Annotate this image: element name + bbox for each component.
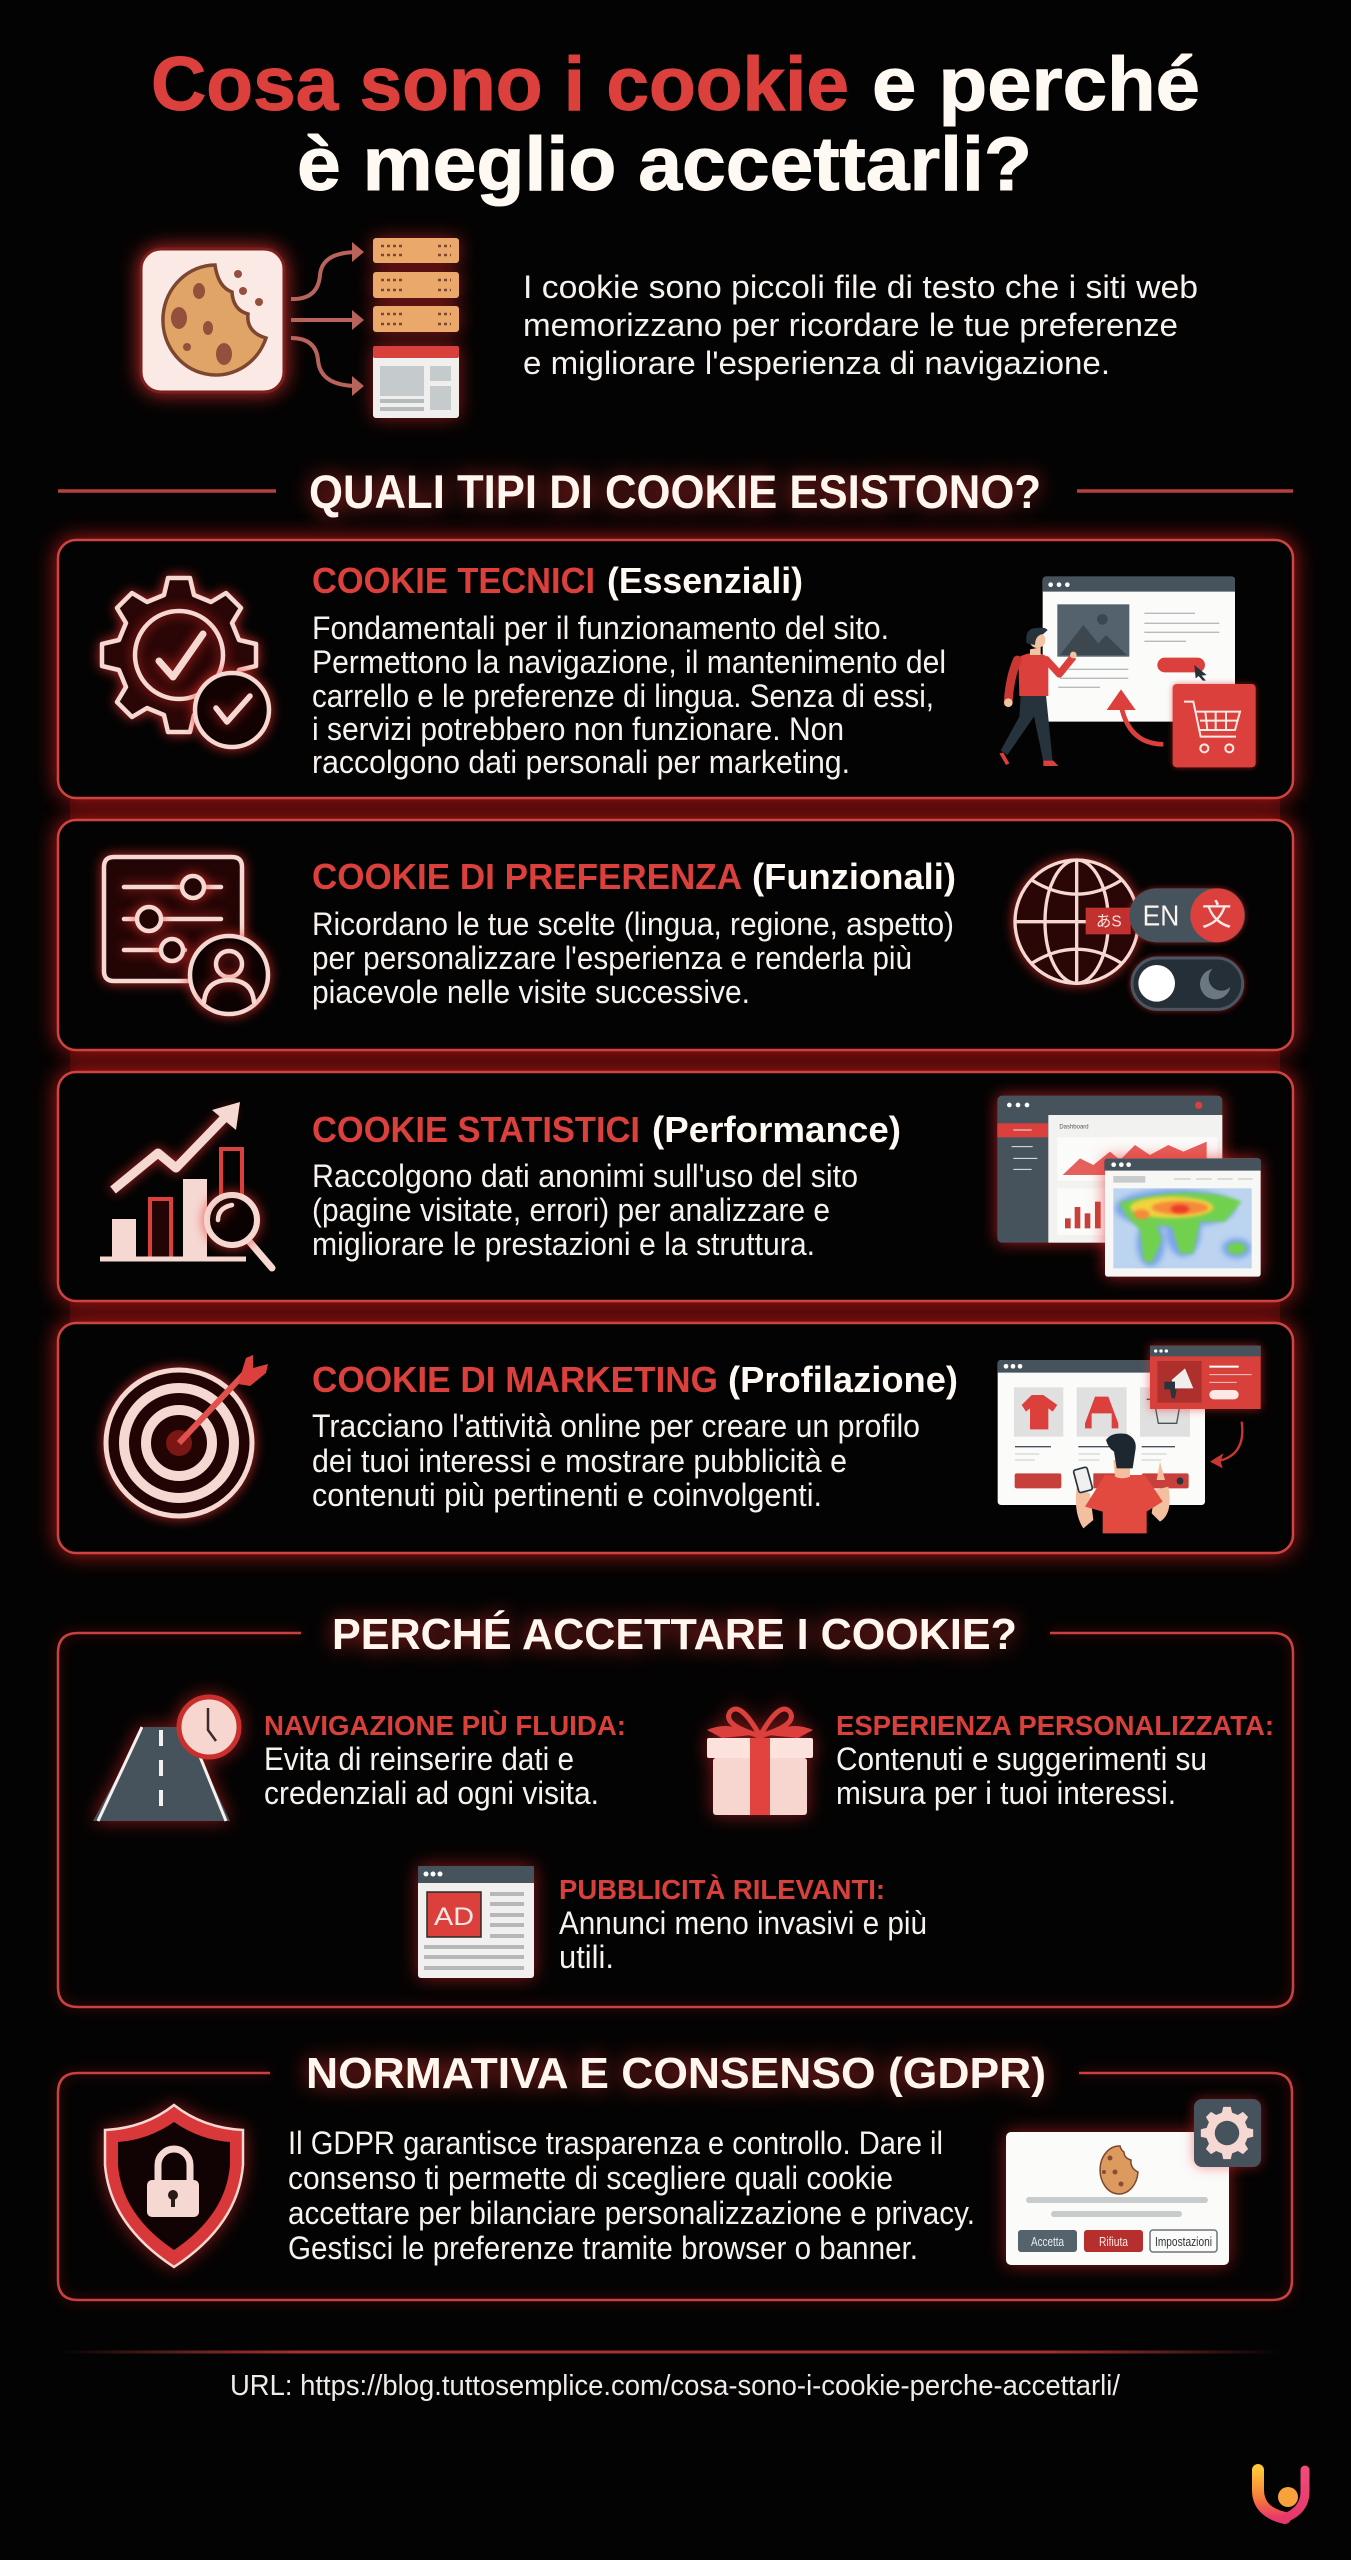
intro text xyxy=(523,269,1198,381)
benefit: pubblicità: PUBBLICITÀ RILEVANTI: xyxy=(559,1874,885,1905)
card text xyxy=(312,906,954,1010)
text: gdpr: Il GDPR garantisce trasparenza e controllo. Dare il xyxy=(288,2125,943,2161)
benefit: navigazione: Evita di reinserire dati e xyxy=(264,1741,574,1777)
illustration: globe and language toggles: あS xyxy=(1096,914,1122,931)
benefit: esperienza: ESPERIENZA PERSONALIZZATA: xyxy=(836,1710,1274,1741)
card text: raccolgono dati personali per marketing. xyxy=(312,744,850,780)
card text: dei tuoi interessi e mostrare pubblicità e xyxy=(312,1443,847,1479)
card heading xyxy=(312,1359,958,1400)
illustration: globe and language toggles: 文 xyxy=(1202,891,1232,935)
intro text: I cookie sono piccoli file di testo che i siti web xyxy=(523,269,1198,305)
icon: shield and lock xyxy=(105,2105,243,2267)
card heading: (Funzionali) xyxy=(752,856,956,897)
intro text: memorizzano per ricordare le tue preferenze xyxy=(523,307,1178,343)
icon: gear with checks xyxy=(102,578,269,747)
text: gdpr xyxy=(288,2125,975,2266)
card text: piacevole nelle visite successive. xyxy=(312,974,750,1010)
card text: Tracciano l'attività online per creare un profilo xyxy=(312,1408,920,1444)
benefit: pubblicità xyxy=(559,1874,927,1975)
card text: Fondamentali per il funzionamento del sito. xyxy=(312,610,889,646)
title xyxy=(151,42,1200,207)
card heading: (Essenziali) xyxy=(607,560,803,601)
title: e perché xyxy=(872,42,1200,127)
illustration: person, browser and cart xyxy=(999,577,1256,767)
card heading: COOKIE DI PREFERENZA xyxy=(312,856,742,897)
card heading: COOKIE STATISTICI xyxy=(312,1109,640,1150)
card text xyxy=(312,610,946,780)
icon: sliders and user xyxy=(104,857,268,1014)
heading: NORMATIVA E CONSENSO (GDPR) xyxy=(306,2049,1046,2098)
benefit: esperienza: Contenuti e suggerimenti su xyxy=(836,1741,1207,1777)
card text: (pagine visitate, errori) per analizzare e xyxy=(312,1192,830,1228)
icon: chart and magnifier xyxy=(100,1102,272,1268)
icon: cookie sent to servers and browser xyxy=(141,238,459,418)
benefit: esperienza xyxy=(836,1710,1274,1811)
heading: PERCHÉ ACCETTARE I COOKIE? xyxy=(332,1609,1017,1659)
illustration: cookie consent banner: Impostazioni xyxy=(1155,2235,1212,2249)
card text: carrello e le preferenze di lingua. Senza di essi, xyxy=(312,678,934,714)
source url: URL: https://blog.tuttosemplice.com/cosa-sono-i-cookie-perche-accettarli/ xyxy=(230,2370,1121,2402)
text: gdpr: accettare per bilanciare personalizzazione e privacy. xyxy=(288,2195,975,2231)
benefit: navigazione xyxy=(264,1710,626,1811)
card heading: COOKIE DI MARKETING xyxy=(312,1359,718,1400)
card heading: COOKIE TECNICI xyxy=(312,560,595,601)
benefit: navigazione: NAVIGAZIONE PIÙ FLUIDA: xyxy=(264,1710,626,1741)
panel: cookie di marketing xyxy=(58,1323,1293,1553)
card heading xyxy=(312,856,956,897)
icon: ad window xyxy=(418,1866,534,1978)
panel: cookie tecnici xyxy=(58,540,1293,798)
illustration: cookie consent banner: Rifiuta xyxy=(1099,2235,1128,2249)
benefit: navigazione: credenziali ad ogni visita. xyxy=(264,1775,599,1811)
icon: ad window: AD xyxy=(434,1903,474,1931)
card heading xyxy=(312,1109,901,1150)
title: è meglio accettarli? xyxy=(297,122,1032,207)
intro text: e migliorare l'esperienza di navigazione. xyxy=(523,345,1110,381)
card text: Raccolgono dati anonimi sull'uso del sito xyxy=(312,1158,858,1194)
card text: contenuti più pertinenti e coinvolgenti. xyxy=(312,1477,822,1513)
illustration: cookie consent banner xyxy=(1006,2099,1261,2265)
card text: per personalizzare l'esperienza e renderla più xyxy=(312,940,912,976)
illustration: globe and language toggles: EN xyxy=(1143,901,1179,933)
title: Cosa sono i cookie xyxy=(151,42,849,127)
illustration: globe and language toggles xyxy=(1015,860,1245,1009)
card text: migliorare le prestazioni e la struttura. xyxy=(312,1226,815,1262)
heading: types of cookies: QUALI TIPI DI COOKIE ESISTONO? xyxy=(309,465,1041,518)
benefit: pubblicità: Annunci meno invasivi e più xyxy=(559,1905,927,1941)
icon: target and arrow xyxy=(106,1355,268,1516)
benefit: pubblicità: utili. xyxy=(559,1939,614,1975)
card text: Permettono la navigazione, il mantenimento del xyxy=(312,644,946,680)
illustration: cookie consent banner: Accetta xyxy=(1031,2235,1064,2249)
panel: cookie di preferenza xyxy=(58,820,1293,1050)
card text xyxy=(312,1158,858,1262)
card heading xyxy=(312,560,803,601)
icon: road and clock xyxy=(93,1697,239,1821)
illustration: dashboard and heatmap xyxy=(997,1096,1261,1277)
icon: gift xyxy=(707,1709,813,1815)
panel: perché accettare i cookie xyxy=(58,1609,1293,2007)
logo xyxy=(1258,2470,1305,2518)
text: gdpr: consenso ti permette di scegliere quali cookie xyxy=(288,2160,893,2196)
card text: i servizi potrebbero non funzionare. Non xyxy=(312,711,844,747)
illustration: dashboard and heatmap: Dashboard xyxy=(1059,1124,1089,1130)
panel: cookie statistici xyxy=(58,1072,1293,1301)
card heading: (Performance) xyxy=(652,1109,901,1150)
card text: Ricordano le tue scelte (lingua, regione, aspetto) xyxy=(312,906,954,942)
benefit: esperienza: misura per i tuoi interessi. xyxy=(836,1775,1176,1811)
illustration: shop page, ad and shopper xyxy=(998,1346,1261,1533)
card text xyxy=(312,1408,920,1513)
text: gdpr: Gestisci le preferenze tramite browser o banner. xyxy=(288,2230,918,2266)
panel: normativa e consenso xyxy=(58,2049,1292,2300)
card heading: (Profilazione) xyxy=(728,1359,958,1400)
